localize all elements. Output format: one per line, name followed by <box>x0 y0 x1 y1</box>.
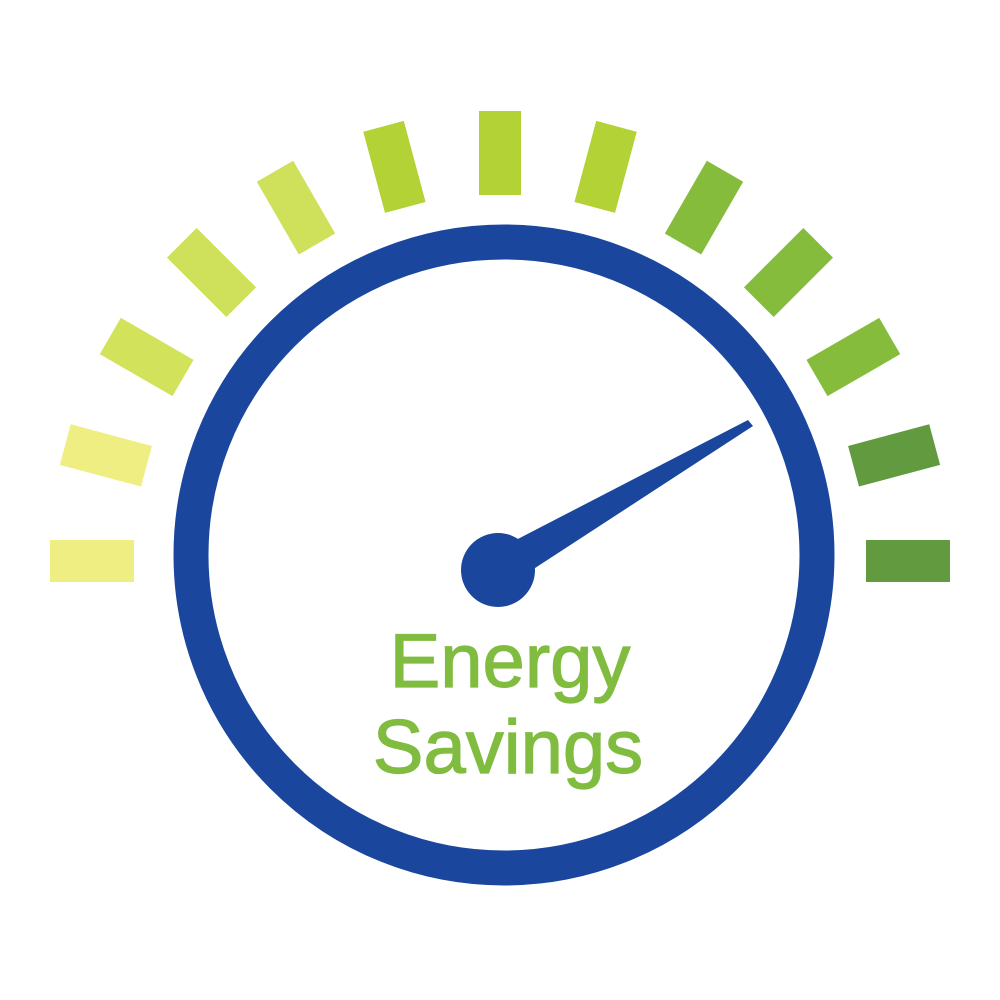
needle <box>461 420 753 607</box>
dial ring <box>191 242 817 868</box>
label: Energy Savings: Energy <box>390 619 630 704</box>
label: Energy Savings <box>373 619 643 790</box>
gauge ticks <box>50 111 950 582</box>
label: Energy Savings: Savings <box>373 705 643 790</box>
